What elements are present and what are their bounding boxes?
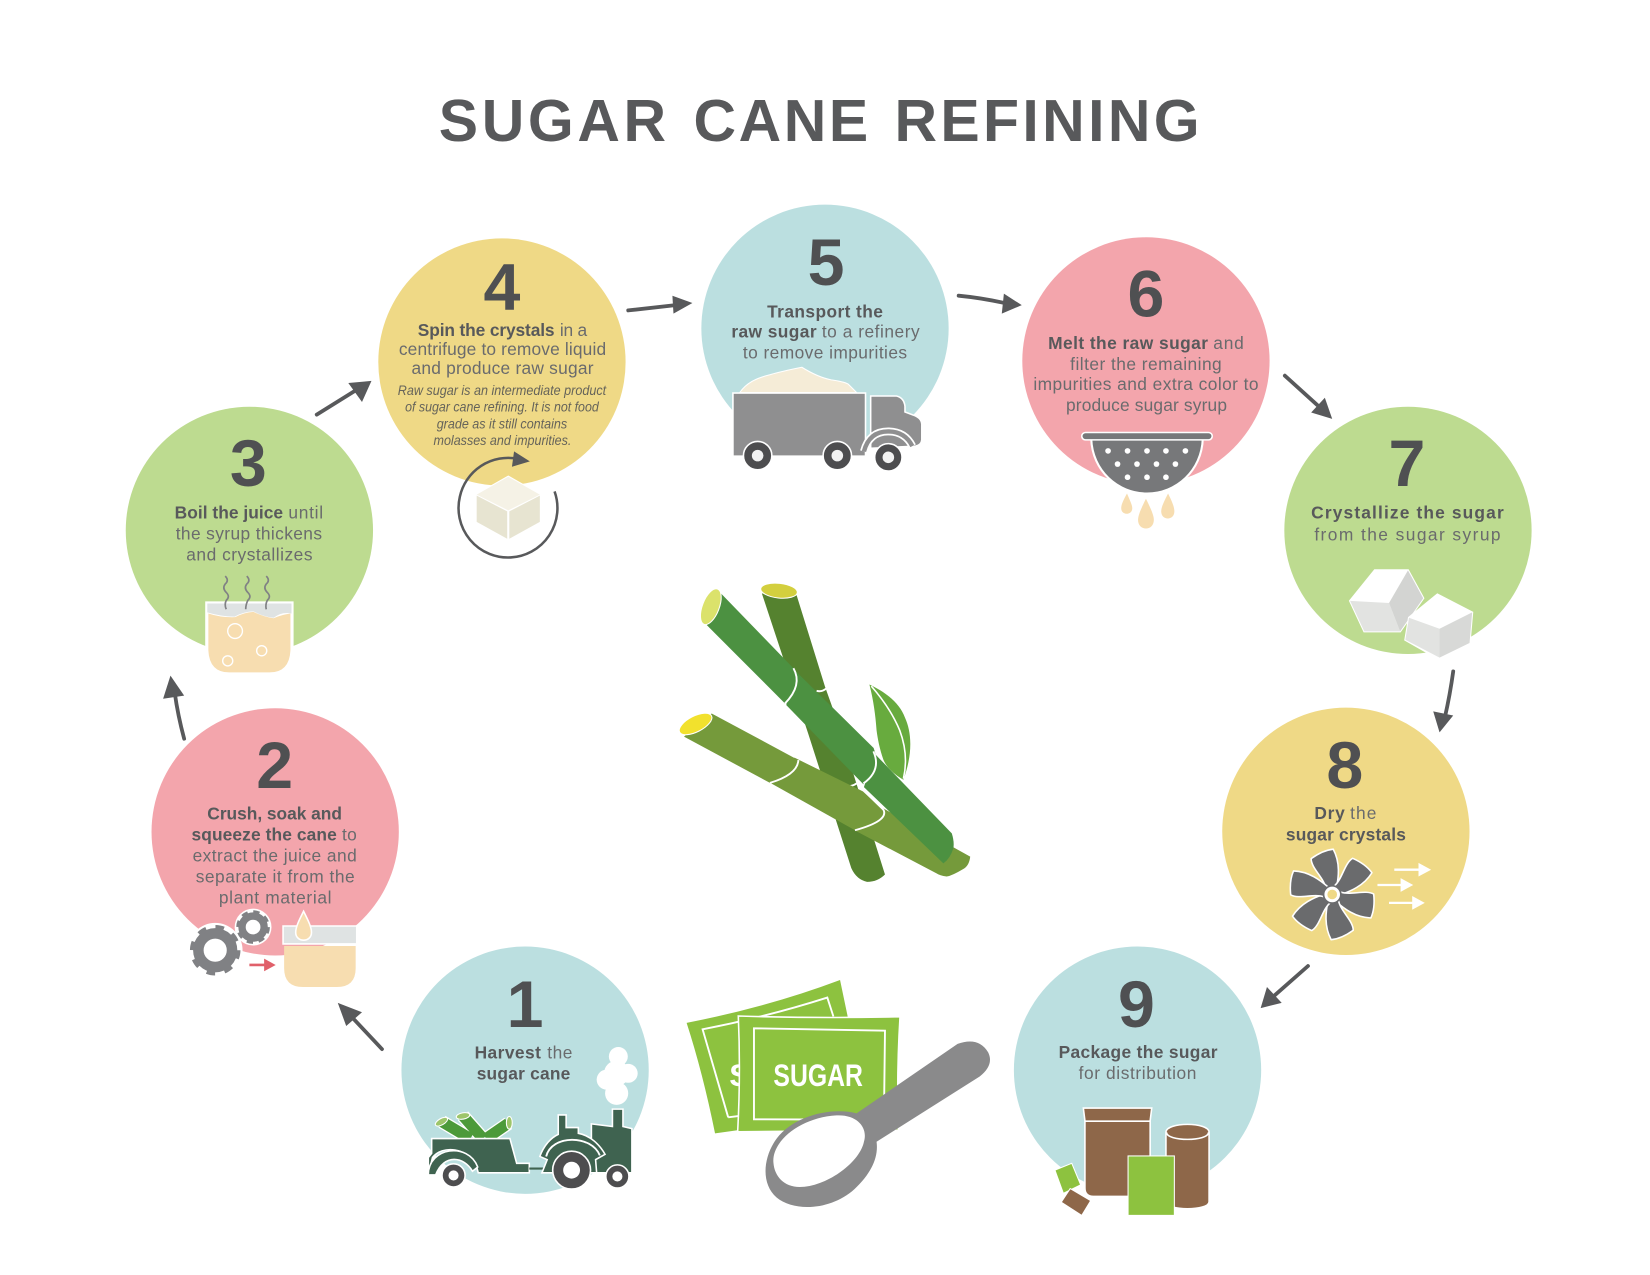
text: step 4: of sugar cane refining. It is not food <box>405 399 599 414</box>
icon: truck <box>733 367 922 471</box>
text: step 5: to remove impurities <box>743 342 907 362</box>
illustration: sugar packets and spoon <box>687 980 990 1207</box>
text: step 2: separate it from the <box>196 866 355 886</box>
text: step 2: plant material <box>219 887 331 907</box>
text: step 9: Package the sugar <box>1059 1042 1218 1062</box>
icon: colander with drops <box>1082 432 1212 529</box>
number 4: 4 <box>484 250 521 324</box>
text: step 2 <box>192 804 357 907</box>
illustration: sugar cane stalks <box>676 581 970 882</box>
text: step 4: grade as it still contains <box>437 416 567 431</box>
icon: sugar cubes <box>1350 570 1472 659</box>
stalk: mid green top section <box>696 586 797 703</box>
text: step 1: Harvest <box>475 1043 541 1063</box>
icon: sugar packages <box>1055 1108 1209 1215</box>
text: step 4: Raw sugar is an intermediate product <box>398 383 607 398</box>
panel: step 8 dry <box>1222 708 1470 955</box>
text: step 6: produce sugar syrup <box>1066 395 1227 415</box>
text: step 6: filter the remaining <box>1070 354 1222 374</box>
arrow: 6 to 7 <box>1285 376 1332 419</box>
text: step 2: Crush, soak and <box>207 804 342 824</box>
text: step 3: the syrup thickens <box>176 523 322 543</box>
title: REFINING <box>894 89 1200 154</box>
text: step 8: the <box>1350 803 1376 823</box>
number 2: 2 <box>256 729 293 803</box>
text: step 1: the <box>547 1043 572 1063</box>
text: step 8: sugar crystals <box>1286 824 1406 844</box>
number 5: 5 <box>808 226 844 300</box>
text: step 5: to a refinery <box>822 321 920 341</box>
number 6: 6 <box>1128 258 1164 332</box>
text: step 1: sugar cane <box>477 1064 571 1084</box>
panel: step 4 spin <box>378 238 626 558</box>
text: step 2: to <box>342 824 357 844</box>
leaf <box>869 685 910 780</box>
text: step 4: molasses and impurities. <box>434 433 571 448</box>
icon: tractor with trailer <box>428 1047 638 1189</box>
stalk: olive end section <box>854 808 970 877</box>
stalk: dark green <box>760 581 885 882</box>
arrow: 5 to 6 <box>959 294 1022 314</box>
arrow: 8 to 9 <box>1261 966 1308 1008</box>
text: step 6: impurities and extra color to <box>1033 374 1259 394</box>
number 8: 8 <box>1326 729 1363 803</box>
text: step 3 <box>175 502 323 564</box>
text: step 7: from the sugar syrup <box>1314 524 1501 544</box>
text: step 8: Dry <box>1314 803 1345 823</box>
arrow: 2 to 3 <box>163 676 184 739</box>
title <box>439 89 1200 154</box>
text: step 4 <box>398 320 607 448</box>
text: step 2: squeeze the cane <box>192 824 337 844</box>
icon: fan <box>1282 849 1431 940</box>
number 1: 1 <box>507 968 544 1042</box>
text: step 6 <box>1033 333 1259 415</box>
text: step 6: and <box>1213 333 1244 353</box>
text: step 9 <box>1059 1042 1218 1083</box>
stalk: olive top section <box>676 709 798 783</box>
spoon <box>766 1042 990 1207</box>
icon: centrifuge cube <box>459 451 557 558</box>
text: step 3: Boil the juice <box>175 502 283 522</box>
packet: front <box>738 1016 900 1132</box>
number 3: 3 <box>230 427 267 501</box>
icon: boiling beaker <box>205 576 294 675</box>
panel: step 2 crush <box>152 708 399 987</box>
arrow: 1 to 2 <box>338 1003 382 1049</box>
panel: step 9 package <box>1014 947 1261 1215</box>
arrow: 3 to 4 <box>317 381 371 415</box>
text: step 5 <box>731 301 920 362</box>
text: step 5: raw sugar <box>731 321 817 341</box>
packet: back: S <box>729 1057 750 1093</box>
stalk: mid green middle section <box>787 667 876 784</box>
icon: gears and cup <box>188 909 357 987</box>
stalk: olive middle section <box>770 758 884 830</box>
text: step 2: extract the juice and <box>193 845 357 865</box>
text: step 3: and crystallizes <box>186 544 313 564</box>
text: step 4: in a <box>560 320 588 340</box>
title: CANE <box>693 89 868 154</box>
text: step 4: centrifuge to remove liquid <box>399 339 606 359</box>
text: step 5: Transport the <box>767 301 883 321</box>
panel: step 3 boil <box>126 407 373 675</box>
text: step 4: and produce raw sugar <box>411 358 594 378</box>
number 9: 9 <box>1118 968 1155 1042</box>
panel: step 5 transport <box>701 205 949 471</box>
packet: front: SUGAR <box>773 1057 863 1093</box>
text: step 3: until <box>288 502 323 522</box>
panel: step 7 crystallize <box>1284 407 1532 659</box>
number 7: 7 <box>1388 427 1425 501</box>
stalk: mid green end section <box>864 753 954 863</box>
text: step 1 <box>475 1043 572 1084</box>
panel: step 1 harvest <box>401 947 649 1194</box>
text: step 6: Melt the raw sugar <box>1048 333 1208 353</box>
text: step 7 <box>1311 502 1504 544</box>
arrow: 4 to 5 <box>628 296 692 314</box>
text: step 8 <box>1286 803 1406 844</box>
text: step 9: for distribution <box>1079 1063 1196 1083</box>
panel: step 6 melt <box>1022 237 1270 529</box>
text: step 4: Spin the crystals <box>418 320 555 340</box>
title: SUGAR <box>439 89 666 154</box>
text: step 7: Crystallize the sugar <box>1311 502 1504 522</box>
packet: back <box>687 980 848 1133</box>
arrow: 7 to 8 <box>1433 671 1453 732</box>
